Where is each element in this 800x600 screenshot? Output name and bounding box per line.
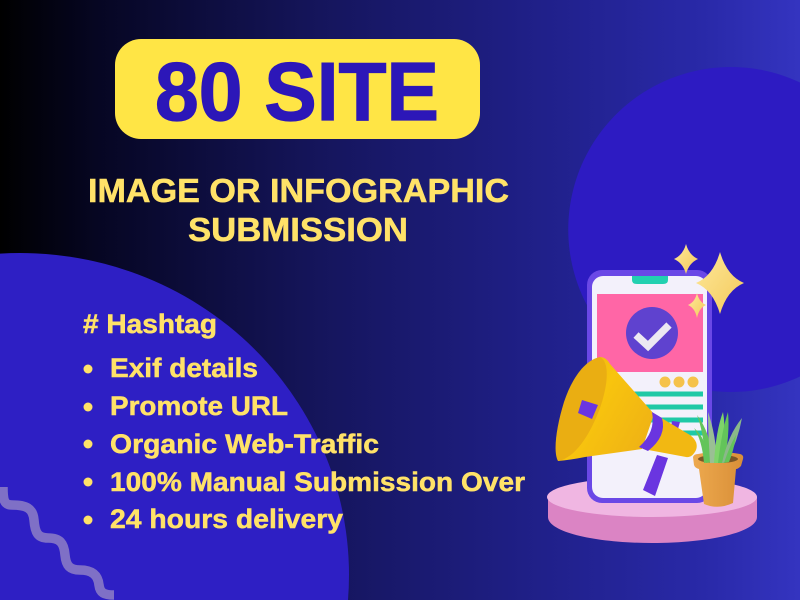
icon: megaphone bbox=[556, 357, 697, 496]
icon: phone bbox=[587, 270, 712, 503]
icon: potted plant bbox=[693, 412, 743, 507]
icon: podium bbox=[547, 477, 757, 543]
squiggle decoration bbox=[3, 487, 114, 595]
bullet list: 24 hours delivery bbox=[110, 504, 343, 534]
background circle left bbox=[0, 253, 349, 600]
bullet list: Promote URL bbox=[110, 391, 288, 421]
background circle right bbox=[568, 67, 800, 392]
illustration: phone and megaphone bbox=[547, 244, 757, 543]
subtitle bbox=[88, 172, 509, 248]
subtitle: SUBMISSION bbox=[188, 211, 408, 248]
bullet list: 100% Manual Submission Over bbox=[110, 467, 526, 497]
bullet list: Exif details bbox=[110, 353, 258, 383]
bullet list: Organic Web-Traffic bbox=[110, 429, 379, 459]
bullet list bbox=[84, 353, 526, 534]
subtitle: IMAGE OR INFOGRAPHIC bbox=[88, 172, 509, 209]
hashtag heading: # Hashtag bbox=[83, 309, 217, 339]
title badge bbox=[115, 39, 480, 139]
icon: sparkles bbox=[674, 244, 744, 318]
title: 80 SITE: 80 SITE bbox=[155, 45, 439, 138]
